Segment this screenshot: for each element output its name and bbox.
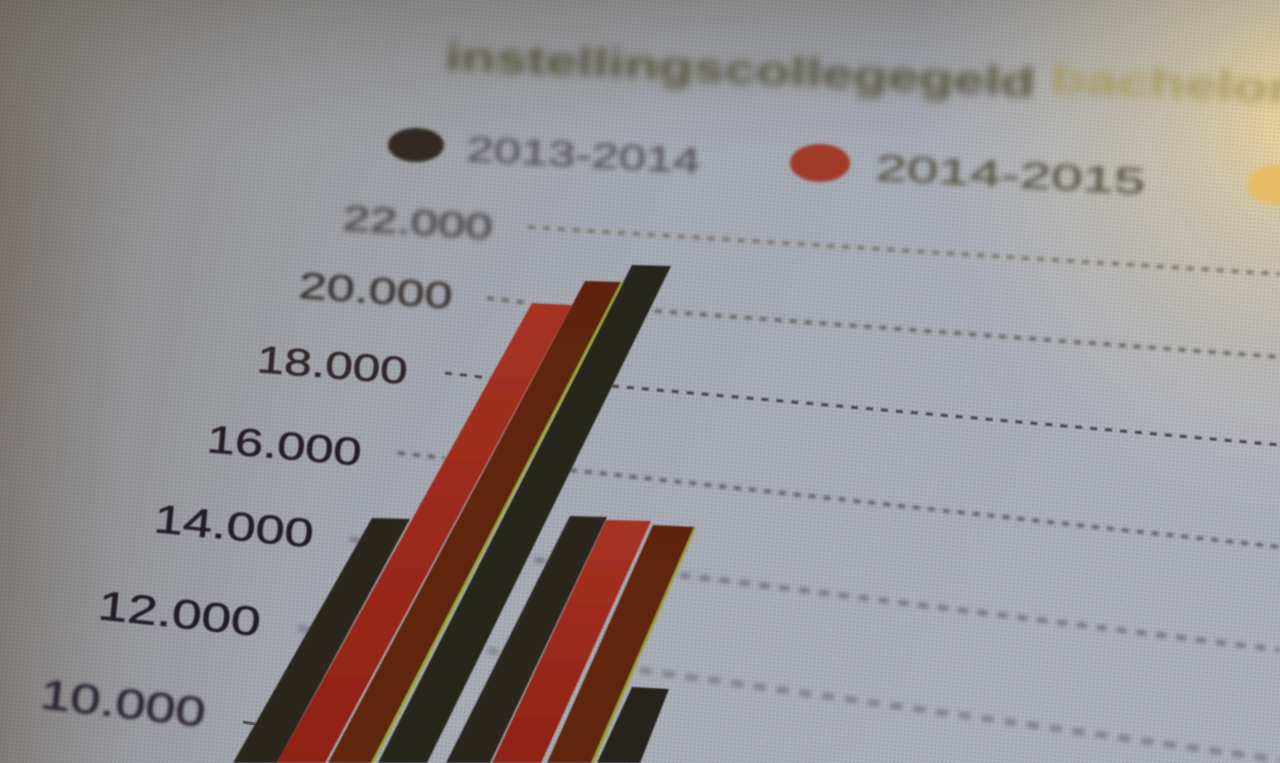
label 16.000: 16.000 <box>205 418 363 474</box>
legend item: 2014-2015 <box>790 144 1146 202</box>
title: bachelor <box>1050 55 1280 112</box>
label 20.000: 20.000 <box>297 265 454 317</box>
bar: group 2 2014-2015 <box>492 520 651 763</box>
legend item: 2013-2014 <box>388 128 701 181</box>
bar: group 2 2015-2016 <box>547 525 695 763</box>
label 14.000: 14.000 <box>152 497 316 556</box>
bar: group 2 2013-2014 <box>446 516 607 763</box>
label 12.000: 12.000 <box>96 582 263 645</box>
bar group 1 <box>233 265 671 763</box>
bar: group 1 2013-2014 <box>233 518 410 763</box>
label 10.000: 10.000 <box>38 670 208 736</box>
legend <box>388 128 1280 205</box>
title <box>445 33 1280 112</box>
bar edge highlight <box>591 527 696 763</box>
label 18.000: 18.000 <box>255 339 409 393</box>
label 22.000: 22.000 <box>342 199 494 247</box>
dashed grid lines <box>243 227 1280 760</box>
y axis labels <box>38 199 494 736</box>
bar: group 1 2014-2015 <box>277 303 572 763</box>
bar edge highlight <box>371 282 623 763</box>
bar: group 1 fourth series <box>378 265 671 763</box>
legend item: 2013-2014: 2013-2014 <box>466 130 701 181</box>
bar: group 1 2015-2016 <box>328 281 622 763</box>
legend item: third series <box>1247 165 1280 205</box>
legend item: 2014-2015: 2014-2015 <box>875 147 1146 202</box>
title: instellingscollegegeld <box>445 33 1036 106</box>
bar group 2 <box>446 516 696 763</box>
bar: group 2 fourth series <box>597 687 669 763</box>
